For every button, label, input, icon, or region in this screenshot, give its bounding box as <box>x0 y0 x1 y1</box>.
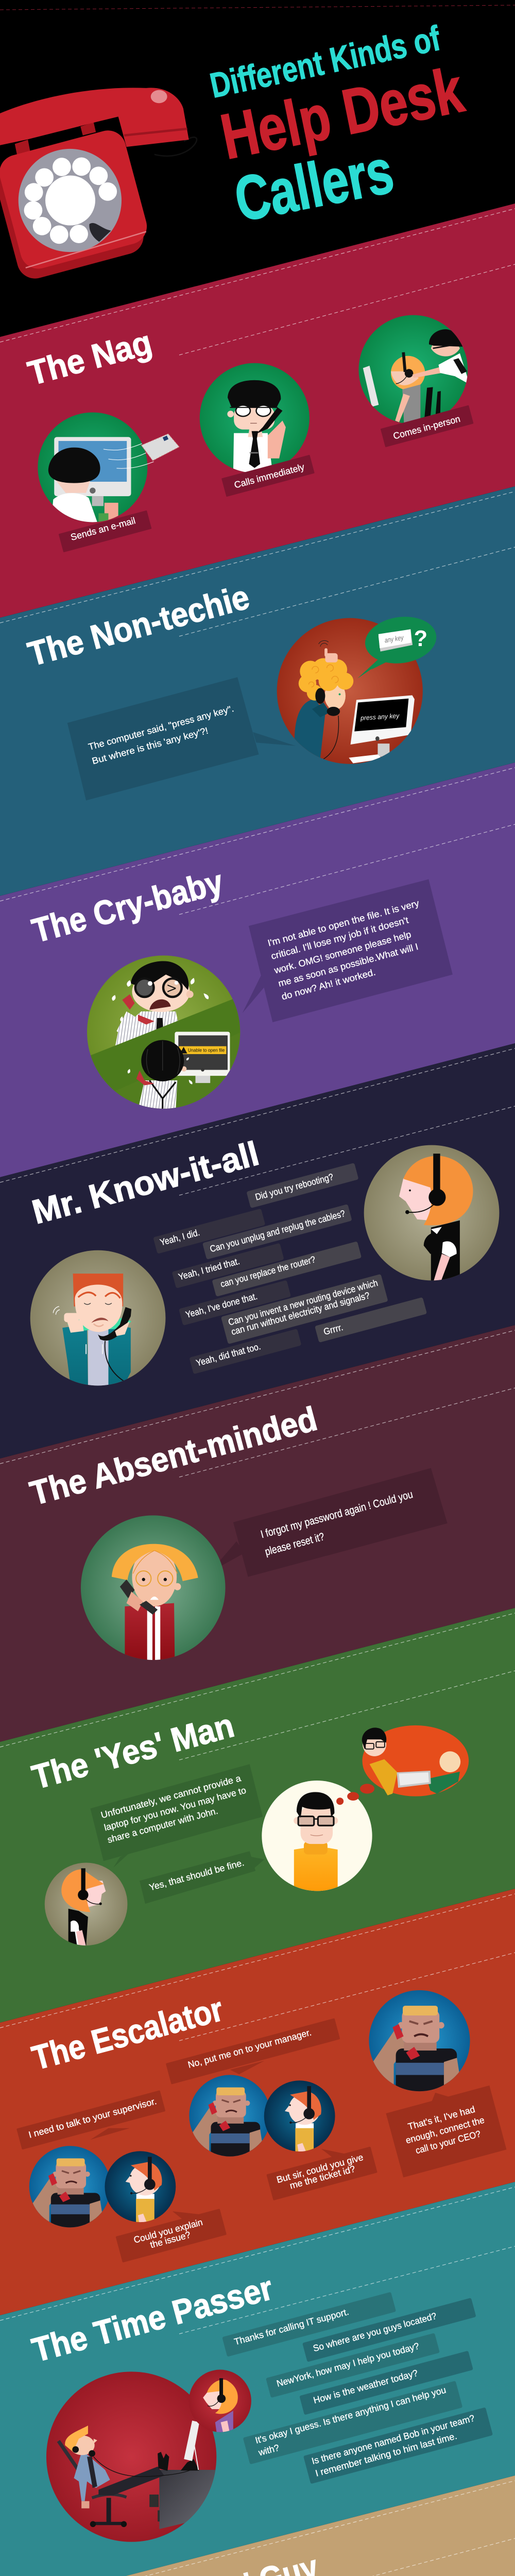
panel: mr. know-it-all <box>0 1043 515 1459</box>
dialogue: time passer and agent: I remember talking to him last time. <box>314 2431 458 2479</box>
icon: agent, second call <box>264 2080 335 2153</box>
icon: feet on desk caller <box>46 2371 217 2542</box>
icon: confused caller at computer: press any key <box>360 711 400 722</box>
icon: confused caller at computer <box>277 612 439 764</box>
icon: comes in-person <box>358 315 470 424</box>
panel: the time passer <box>0 2182 515 2576</box>
speech bubble: cry-baby complaint: do now? Ah! it worked. <box>280 967 376 1002</box>
speech: could you explain the issue <box>115 2209 227 2263</box>
speech bubble: caller: Yes, that should be fine. <box>148 1857 245 1893</box>
panel: the cry-baby <box>0 762 515 1177</box>
icon: confused caller at computer: ? <box>414 626 427 651</box>
heading: the yes man: The 'Yes' Man <box>28 1706 238 1797</box>
speech bubble: cry-baby complaint: me as soon as possible.What will I <box>277 941 419 989</box>
band: the right now guy <box>0 2476 515 2576</box>
speech bubble: cry-baby complaint: critical. I'll lose my job if it doesn't <box>270 915 409 961</box>
caption: sends an e-mail <box>59 511 152 552</box>
speech: could you give me the ticket id: But sir, could you give <box>276 2152 365 2185</box>
icon: agent <box>105 2151 176 2224</box>
title: different kinds of help desk callers: Different Kinds of <box>207 19 443 106</box>
heading: the absent-minded: The Absent-minded <box>26 1399 321 1513</box>
panel: the non-techie <box>0 486 515 896</box>
speech: connect the call to your ceo <box>386 2086 506 2177</box>
dialogue: agent and caller: Grrrr. <box>322 1322 344 1337</box>
icon: caller with finger in ear <box>30 1250 165 1387</box>
icon: escalator caller <box>28 2146 111 2229</box>
band: the cry-baby <box>0 762 515 1177</box>
title: different kinds of help desk callers <box>207 19 470 235</box>
heading: the time passer: The Time Passer <box>28 2268 277 2369</box>
icon: help desk agent with headset <box>364 1145 499 1283</box>
illustrations and captions <box>38 315 474 552</box>
speech bubble: agent: share a computer with John. <box>106 1805 219 1845</box>
caption: comes in-person: Comes in-person <box>392 414 461 442</box>
speech bubble: agent <box>90 1764 263 1868</box>
icon: confused caller at computer: any key <box>384 634 405 644</box>
icon: absent-minded caller <box>81 1515 226 1662</box>
caption: calls immediately <box>221 455 315 497</box>
heading: the nag: The Nag <box>24 323 156 393</box>
speech: connect the call to your ceo: enough, connect the <box>404 2114 486 2146</box>
heading: the non-techie: The Non-techie <box>24 578 253 673</box>
panel: the escalator <box>0 1889 515 2315</box>
illustration and speech <box>67 612 439 801</box>
dialogue: agent and caller: Can you unplug and replug the cables? <box>209 1208 346 1254</box>
band: the absent-minded <box>0 1325 515 1742</box>
caption: comes in-person <box>381 405 474 447</box>
dialogue: agent and caller: Yeah, did that too. <box>195 1341 262 1368</box>
panel: the right now guy <box>126 2476 515 2576</box>
dialogue: time passer and agent: Thanks for calling IT support. <box>233 2307 350 2347</box>
dialogue: agent and caller: Can you invent a new routing device which <box>227 1278 379 1328</box>
icon: yes man <box>262 1725 469 1892</box>
speech: connect the call to your ceo: call to your CEO? <box>415 2128 482 2156</box>
dialogue: agent and caller <box>153 1163 427 1374</box>
band: the nag <box>0 204 515 618</box>
speech bubble: cry-baby complaint: I'm not able to open the file. It is very <box>267 898 420 948</box>
dialogue: agent and caller: Yeah, I did. <box>159 1227 201 1248</box>
dialogue: agent and caller: can you replace the router? <box>219 1254 317 1290</box>
heading: the escalator: The Escalator <box>28 1990 227 2077</box>
heading: the cry-baby: The Cry-baby <box>28 862 227 950</box>
speech: no, put me on to your manager <box>166 2018 340 2084</box>
panel: the absent-minded <box>0 1325 515 1742</box>
speech bubble: forgot password: I forgot my password again ! Could you <box>260 1488 414 1540</box>
icon: crying caller and error screen <box>87 955 240 1109</box>
dialogue: time passer and agent: How is the weather today? <box>312 2368 419 2405</box>
speech: could you explain the issue: the issue? <box>149 2229 192 2250</box>
speech: connect the call to your ceo: That's it, I've had <box>407 2104 476 2132</box>
title: different kinds of help desk callers: Callers <box>229 135 399 235</box>
icon: sends an e-mail <box>38 412 179 526</box>
icon: red rotary telephone <box>0 88 197 282</box>
speech bubble: caller <box>140 1851 264 1904</box>
speech bubble: forgot password <box>210 1468 448 1577</box>
dialogue: time passer and agent: NewYork, how may I help you today? <box>276 2341 420 2389</box>
speech bubble: agent: laptop for you now. You may have to <box>103 1785 247 1833</box>
dialogue: time passer and agent <box>222 2292 493 2484</box>
speech: no, put me on to your manager: No, put me on to your manager. <box>187 2027 313 2070</box>
speech bubble: cry-baby complaint: work. OMG! someone please help <box>272 929 412 976</box>
band: the time passer <box>0 2182 515 2576</box>
caption: calls immediately: Calls immediately <box>233 462 305 490</box>
panel: the yes man <box>0 1608 515 2023</box>
speech: i need to talk to your supervisor <box>16 2090 165 2149</box>
speech: could you give me the ticket id: me the ticket id? <box>288 2163 356 2191</box>
dialogue: time passer and agent: It's okay I guess. Is there anything I can help you <box>254 2385 447 2446</box>
dialogue: time passer and agent: Is there anyone named Bob in your team? <box>311 2413 476 2466</box>
speech bubble: press any key <box>67 677 296 801</box>
dialogue: time passer and agent: So where are you guys located? <box>312 2311 438 2353</box>
speech bubble: agent: Unfortunately, we cannot provide a <box>100 1773 242 1820</box>
panel: header <box>0 19 470 282</box>
dialogue: time passer and agent: with? <box>257 2443 280 2458</box>
speech bubble: forgot password: please reset it? <box>264 1531 326 1558</box>
icon: agent <box>189 2370 251 2434</box>
icon: agent <box>45 1862 127 1946</box>
panel: the nag <box>0 204 515 618</box>
speech: i need to talk to your supervisor: I need to talk to your supervisor. <box>27 2096 158 2140</box>
band: the non-techie <box>0 486 515 896</box>
heading: mr. know-it-all: Mr. Know-it-all <box>28 1134 263 1231</box>
icon: escalator caller, second call <box>188 2075 271 2158</box>
band: the yes man <box>0 1608 515 2023</box>
icon: calls immediately <box>200 363 310 473</box>
icon: escalator caller, third call <box>367 1990 470 2093</box>
speech bubble: press any key: But where is this 'any key'?! <box>91 725 209 766</box>
dialogue: agent and caller: Yeah, I've done that. <box>184 1291 259 1320</box>
caption: sends an e-mail: Sends an e-mail <box>70 515 136 543</box>
speech bubble: press any key: The computer said, "press any key". <box>87 703 235 752</box>
dialogue: agent and caller: can run without electricity and signals? <box>230 1290 371 1337</box>
icon: crying caller and error screen: Unable to open file <box>188 1048 225 1054</box>
speech: could you give me the ticket id <box>266 2146 377 2200</box>
band: the escalator <box>0 1889 515 2315</box>
dialogue: agent and caller: Did you try rebooting? <box>254 1172 335 1202</box>
dialogue: agent and caller: Yeah, I tried that. <box>177 1256 241 1282</box>
speech: could you explain the issue: Could you explain <box>132 2217 204 2245</box>
band: mr. know-it-all <box>0 1043 515 1459</box>
speech bubble: cry-baby complaint <box>243 879 453 1022</box>
